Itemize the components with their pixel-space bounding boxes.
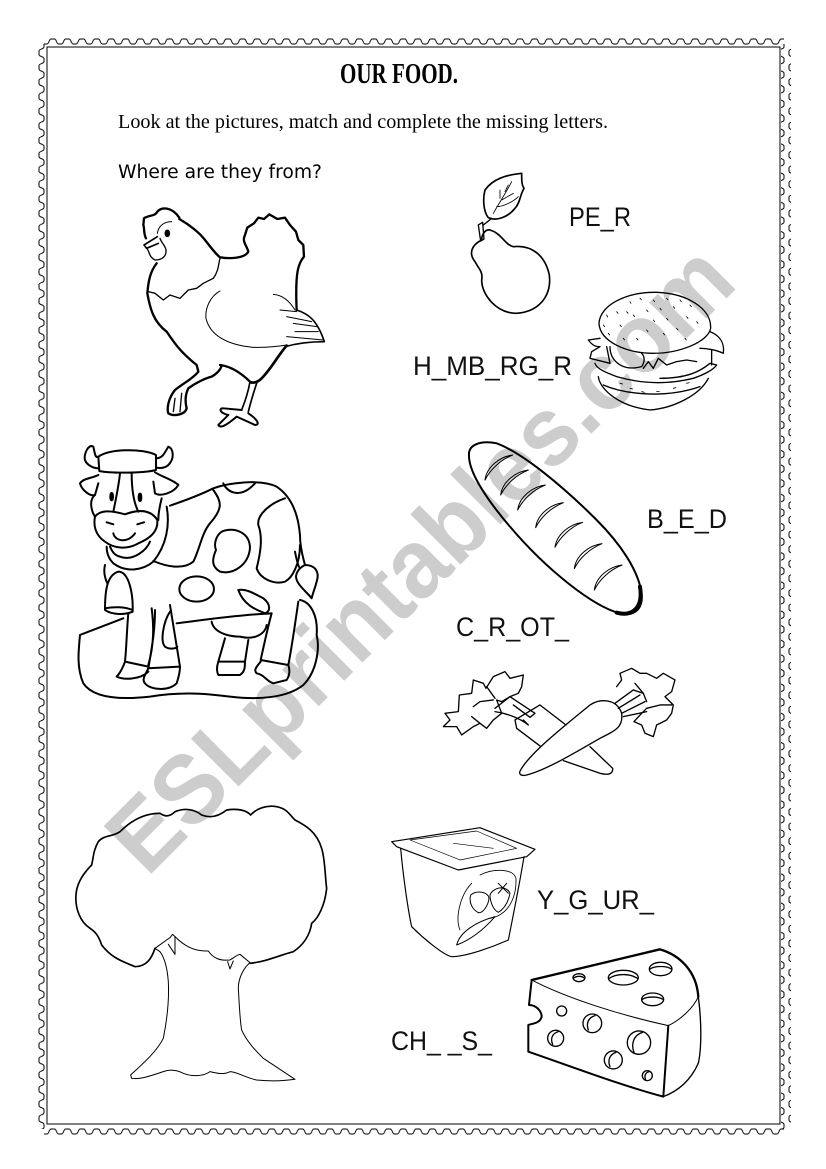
illustration: hamburger xyxy=(588,292,724,410)
illustration: yogurt xyxy=(392,828,535,957)
label: cheese: CH_ _S_ xyxy=(391,1026,493,1056)
title: OUR FOOD. xyxy=(340,58,458,90)
label: pear: PE_R xyxy=(569,202,631,232)
instruction text: Look at the pictures, match and complete the missing letters. xyxy=(118,112,608,133)
label: carrot: C_R_OT_ xyxy=(456,612,570,642)
illustration: carrots xyxy=(443,668,675,775)
label: hamburger: H_MB_RG_R xyxy=(413,351,572,381)
label: yogurt: Y_G_UR_ xyxy=(537,885,655,915)
illustration: bread xyxy=(469,442,642,614)
question text: Where are they from? xyxy=(118,162,322,183)
illustration: hen xyxy=(143,208,324,427)
illustration: cheese xyxy=(528,949,701,1097)
illustration: cow xyxy=(79,446,318,698)
label: bread: B_E_D xyxy=(647,504,727,534)
illustration: pear xyxy=(472,173,550,313)
illustration: tree xyxy=(76,806,327,1081)
watermark: ESLprintables.com xyxy=(84,223,754,893)
